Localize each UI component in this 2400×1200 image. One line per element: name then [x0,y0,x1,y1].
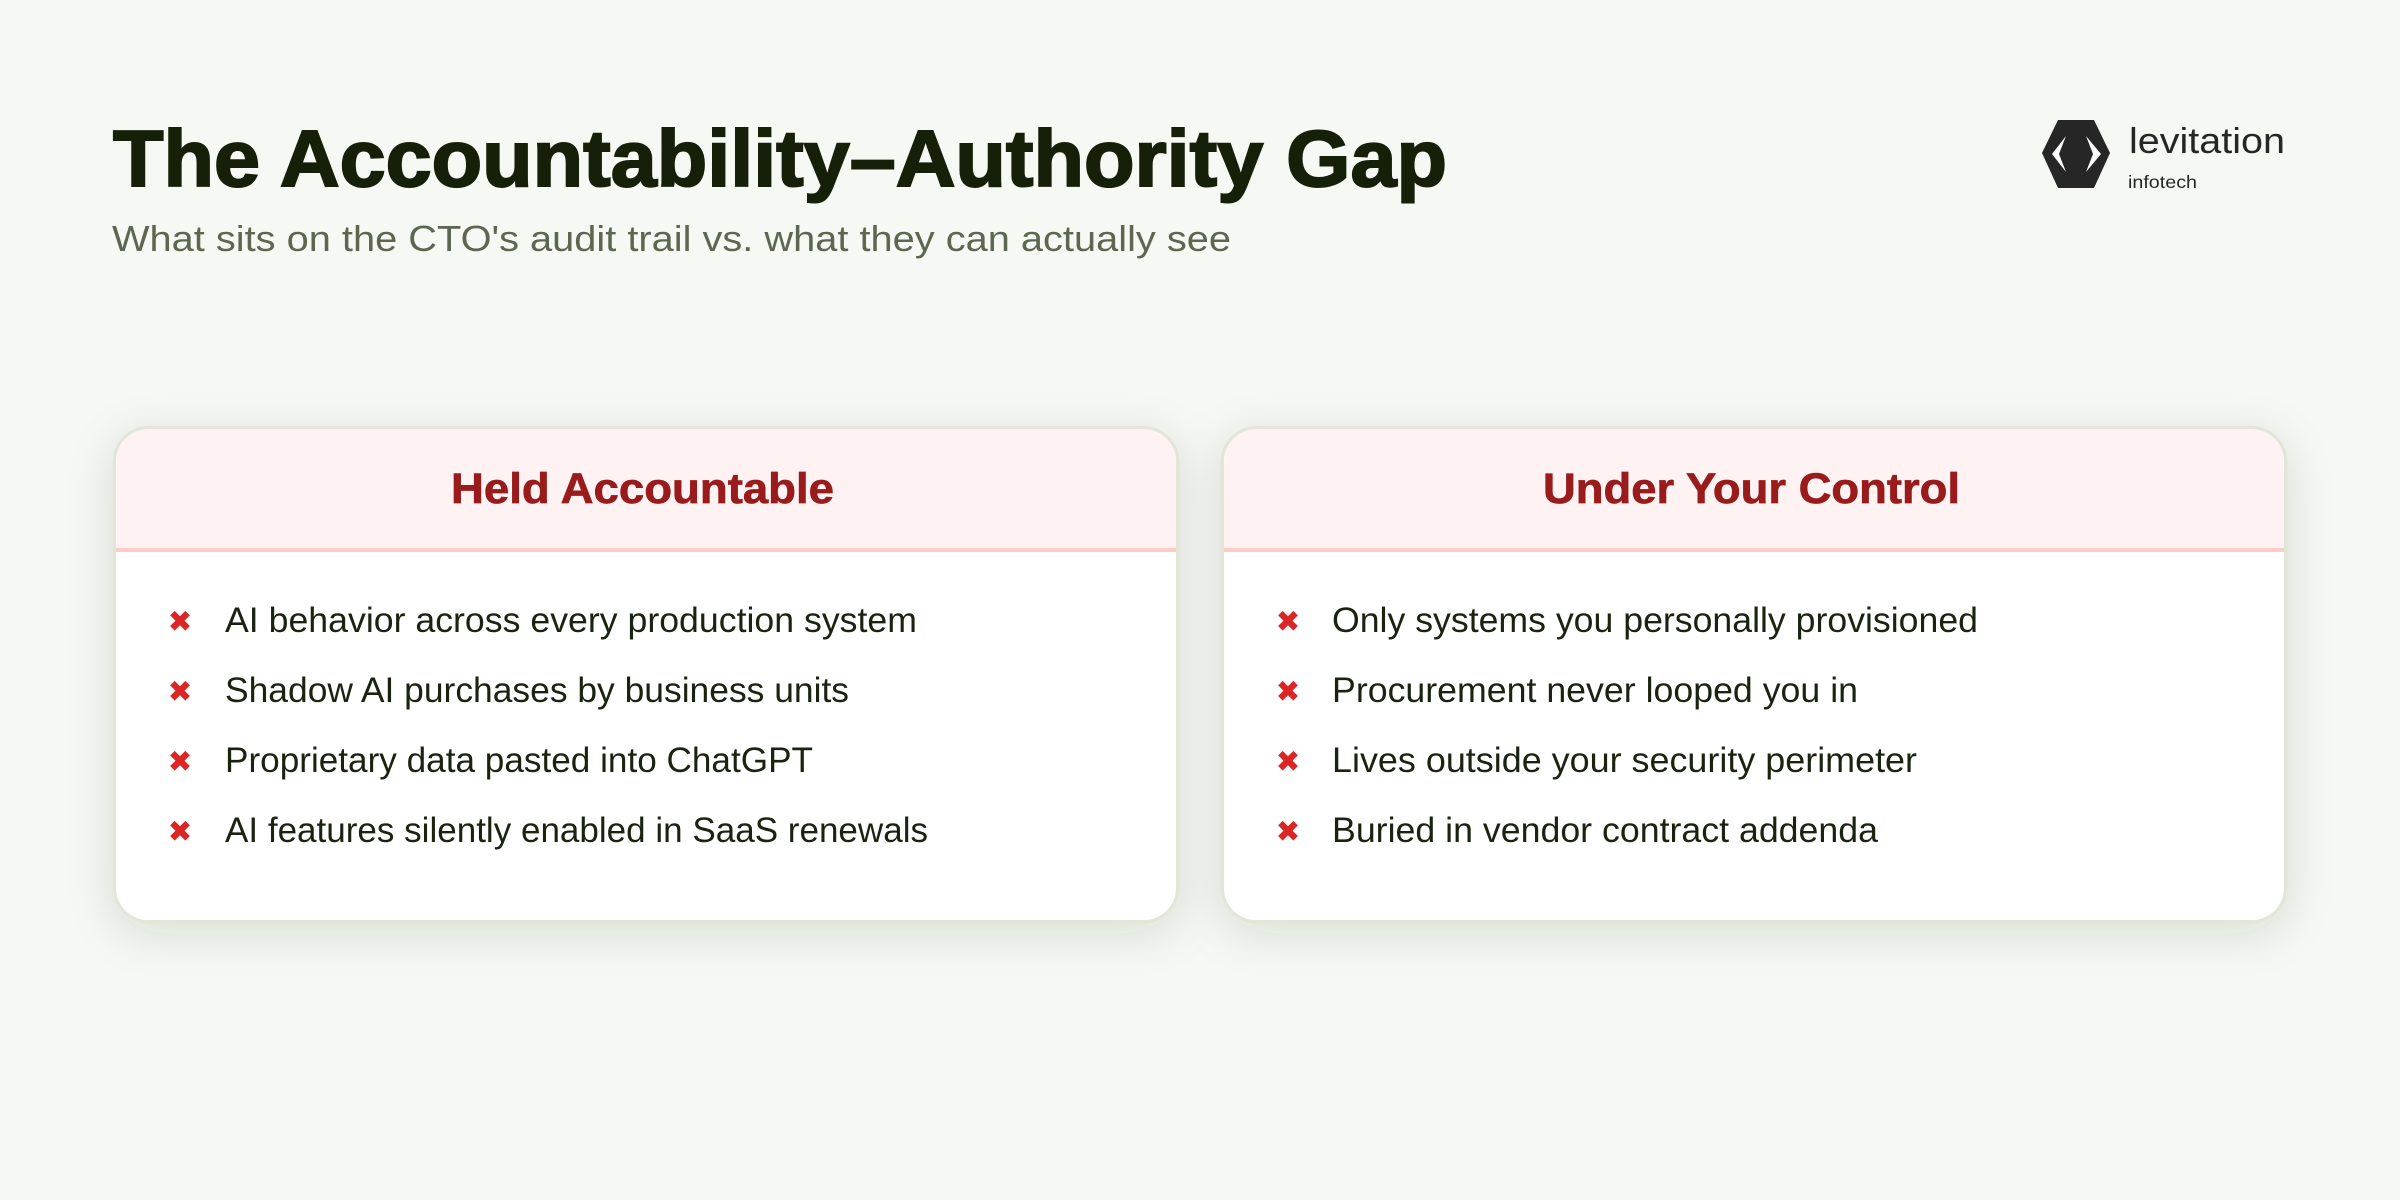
heading: under your control: Under Your Control [1543,465,1960,513]
item 2: Procurement never looped you in [1332,671,1858,710]
list: accountable items [172,601,928,850]
title: The Accountability–Authority Gap [113,114,1447,203]
logo subtext: infotech [2128,172,2197,192]
logo wordmark: levitation [2129,120,2285,161]
panel: under your control [1220,426,2287,924]
item 2: Shadow AI purchases by business units [225,671,849,710]
panel header background [1224,429,2284,548]
item 1: Only systems you personally provisioned [1332,601,1978,640]
subtitle: What sits on the CTO's audit trail vs. what they can actually see [112,218,1231,259]
list: control items [1280,601,1978,850]
icon: hexagon with chevrons [2042,120,2110,188]
item 4: Buried in vendor contract addenda [1332,811,1879,850]
panel header background [116,429,1176,548]
panel: held accountable [113,426,1179,924]
logo: levitation infotech [2042,120,2285,192]
item 4: AI features silently enabled in SaaS renewals [225,811,928,850]
heading: held accountable: Held Accountable [451,465,834,513]
item 1: AI behavior across every production system [225,601,917,640]
item 3: Proprietary data pasted into ChatGPT [225,741,813,780]
item 3: Lives outside your security perimeter [1332,741,1917,780]
